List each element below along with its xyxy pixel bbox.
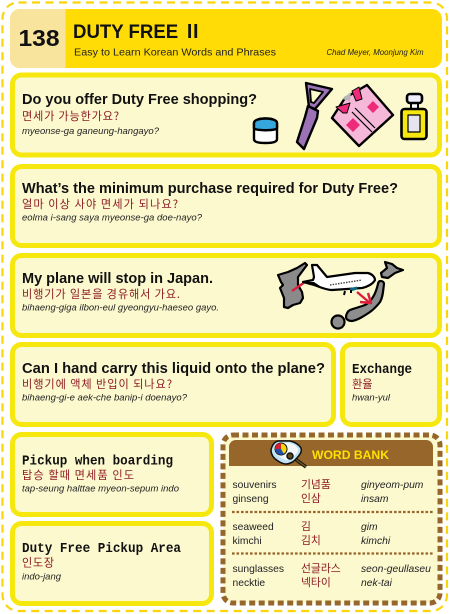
- panel: duty free shopping: [12, 75, 440, 155]
- vocabulary rows: gim: [361, 522, 378, 533]
- vocabulary rows: ginyeom-pum: [361, 480, 424, 491]
- word bank header: [229, 440, 433, 466]
- vocabulary rows: 선글라스: [301, 560, 341, 576]
- korean: 비행기가 일본을 경유해서 가요.: [22, 286, 180, 302]
- korean: 비행기에 액체 반입이 되나요?: [22, 376, 172, 392]
- vocabulary rows: 김치: [301, 532, 321, 548]
- vocabulary rows: souvenirs: [232, 480, 277, 491]
- korean: 인도장: [22, 554, 54, 570]
- authors: Chad Meyer, Moonjung Kim: [326, 48, 424, 57]
- romanization: bihaeng-gi-e aek-che banip-i doenayo?: [22, 392, 188, 404]
- romanization: bihaeng-giga ilbon-eul gyeongyu-haeseo gayo.: [22, 302, 219, 314]
- panel: minimum purchase: [12, 166, 440, 246]
- red route: [292, 282, 370, 303]
- japan north: [381, 262, 403, 278]
- icon: fan: [271, 441, 306, 467]
- panel: plane stop: [12, 256, 440, 336]
- plane: [303, 265, 375, 290]
- panel: exchange: [342, 344, 440, 424]
- romanization: tap-seung halttae myeon-sepum indo: [22, 484, 179, 494]
- romanization: hwan-yul: [352, 392, 391, 404]
- vocabulary rows: kimchi: [232, 536, 262, 547]
- icon: necktie: [297, 83, 332, 149]
- vocabulary rows: necktie: [232, 578, 265, 589]
- heading: Do you offer Duty Free shopping?: [22, 92, 257, 108]
- island: [332, 316, 344, 328]
- vocabulary rows: 기념품: [301, 476, 331, 492]
- vocabulary rows: seaweed: [232, 522, 274, 533]
- vocabulary rows: [232, 476, 431, 590]
- icon: folded shirt: [332, 85, 393, 146]
- romanization: myeonse-ga ganeung-hangayo?: [22, 126, 160, 137]
- panel: word bank: [223, 435, 440, 603]
- icon: perfume bottle: [402, 94, 426, 139]
- heading: Pickup when boarding: [22, 454, 173, 470]
- heading: Exchange: [352, 363, 412, 378]
- korean: 얼마 이상 사야 면세가 되나요?: [22, 196, 178, 212]
- icon: plane route map: [278, 262, 403, 328]
- vocabulary rows: nek-tai: [361, 578, 393, 589]
- heading: What’s the minimum purchase required for Duty Free?: [22, 181, 398, 197]
- subtitle: Easy to Learn Korean Words and Phrases: [74, 46, 276, 58]
- romanization: eolma i-sang saya myeonse-ga doe-nayo?: [22, 212, 203, 224]
- vocabulary rows: ginseng: [232, 494, 269, 505]
- korean: 면세가 가능한가요?: [22, 108, 119, 124]
- icon: cream jar: [254, 118, 277, 143]
- korea shape: [278, 263, 307, 308]
- panel: pickup area: [12, 524, 212, 604]
- japan main: [346, 281, 384, 321]
- vocabulary rows: 인삼: [301, 490, 321, 506]
- title: DUTY FREE Ⅱ: [73, 22, 202, 43]
- vocabulary rows: insam: [361, 494, 389, 505]
- vocabulary rows: kimchi: [361, 536, 391, 547]
- heading: My plane will stop in Japan.: [22, 271, 213, 287]
- heading: Can I hand carry this liquid onto the plane?: [22, 361, 325, 377]
- vocabulary rows: 넥타이: [301, 574, 331, 590]
- korean: 환율: [352, 376, 373, 392]
- vocabulary rows: 김: [301, 518, 311, 534]
- vocabulary rows: seon-geullaseu: [361, 564, 431, 575]
- panel: liquid carry on: [12, 344, 334, 424]
- korean: 탑승 할때 면세품 인도: [22, 467, 134, 483]
- romanization: indo-jang: [22, 572, 62, 582]
- word bank title: WORD BANK: [312, 448, 389, 462]
- header banner: [10, 9, 442, 68]
- vocabulary rows: sunglasses: [232, 564, 284, 575]
- lesson number: 138: [18, 25, 60, 51]
- panel: pickup when boarding: [12, 434, 212, 514]
- heading: Duty Free Pickup Area: [22, 542, 181, 557]
